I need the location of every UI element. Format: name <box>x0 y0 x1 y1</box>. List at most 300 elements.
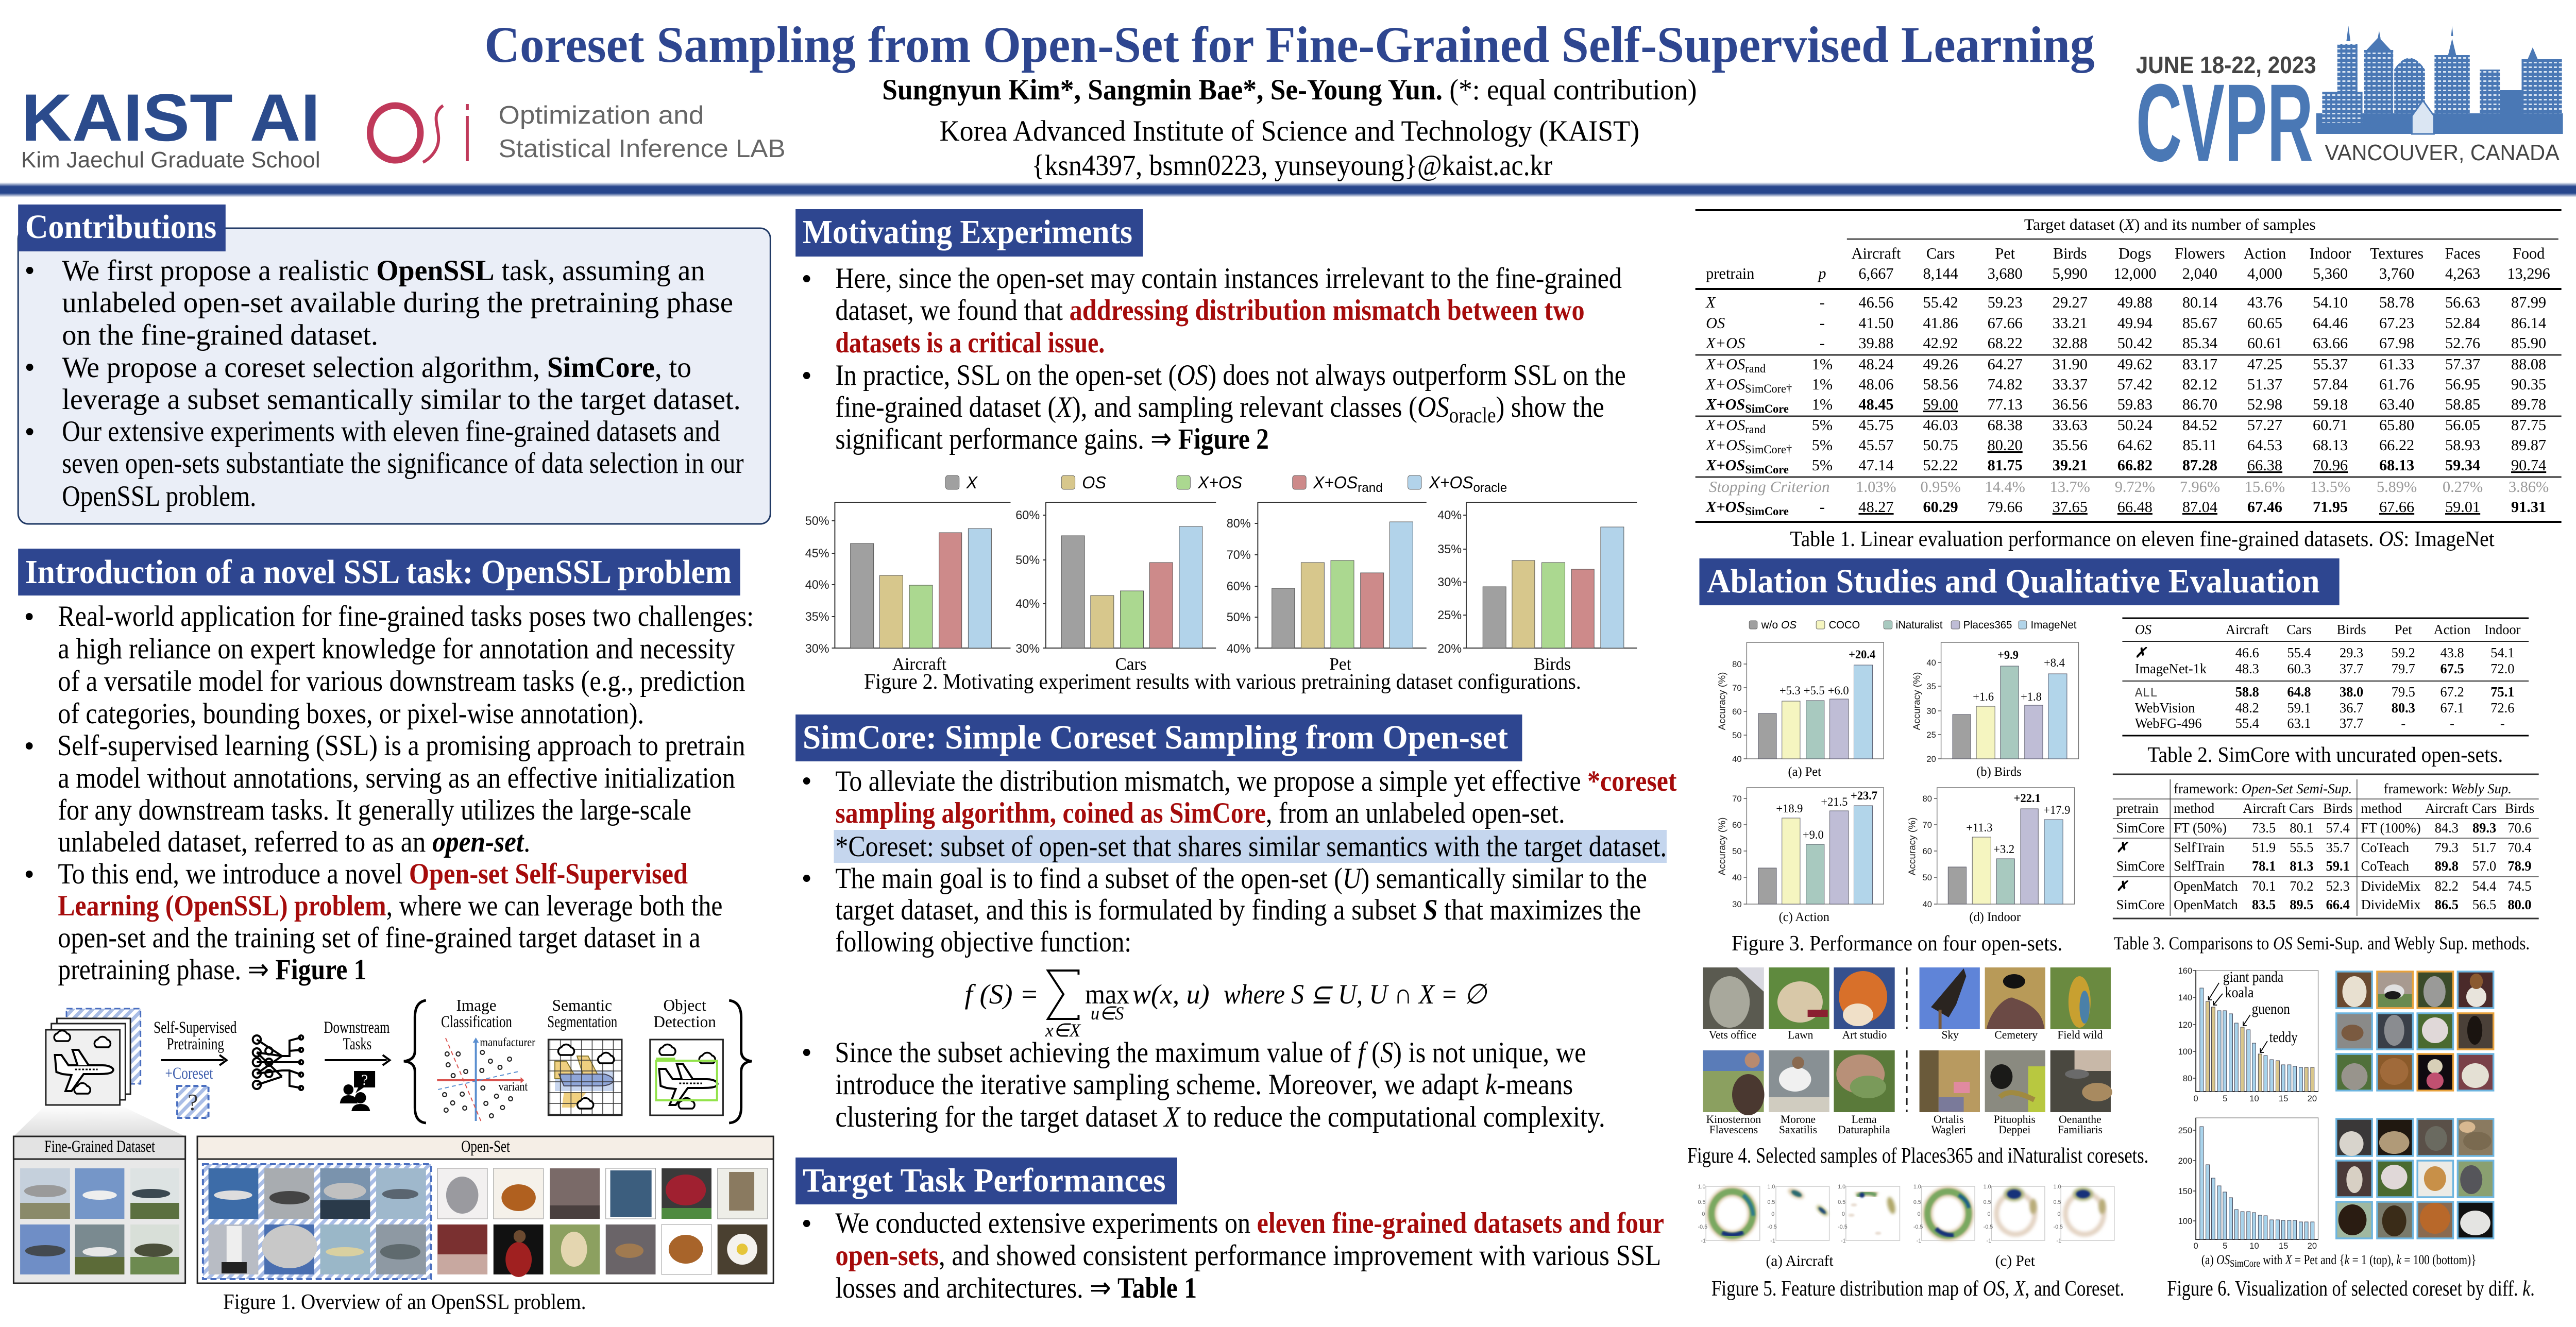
table 1: linear evaluation: SimCore <box>1745 505 1789 518</box>
map tick labels: -0.5 <box>1698 1224 1707 1230</box>
table 3: semi-sup and webly sup comparisons: SimCore <box>2116 897 2165 912</box>
table 1: linear evaluation: SimCore <box>1745 402 1789 415</box>
table 1: linear evaluation: 6,667 <box>1858 265 1894 282</box>
task: image classification: variant <box>499 1080 528 1094</box>
table 1: linear evaluation: 86.14 <box>2511 314 2546 332</box>
table 3: semi-sup and webly sup comparisons: 89.8 <box>2435 858 2459 874</box>
table 3: semi-sup and webly sup comparisons: ✗ <box>2116 840 2128 855</box>
table 1: linear evaluation: 5,360 <box>2313 265 2348 282</box>
table 1: linear evaluation: 87.04 <box>2182 498 2217 516</box>
table 1: linear evaluation: 3,680 <box>1988 265 2023 282</box>
chart: (d) Indoor: 50 <box>1923 873 1932 882</box>
table 3: semi-sup and webly sup comparisons: Birds <box>2505 801 2534 816</box>
table 1: linear evaluation: X <box>1705 294 1716 311</box>
table 1: linear evaluation: X+OS <box>1706 416 1745 434</box>
table 1: linear evaluation: 5% <box>1812 416 1833 434</box>
table 1: linear evaluation: 0.27% <box>2443 478 2483 496</box>
table 3: semi-sup and webly sup comparisons: FT (50%) <box>2174 820 2227 836</box>
map tick labels: 0.5 <box>1767 1199 1775 1205</box>
table 1: linear evaluation: 52.76 <box>2445 334 2480 352</box>
table 1: linear evaluation: 4,000 <box>2247 265 2282 282</box>
chart: (b) Birds: 20 <box>1926 754 1936 764</box>
table 3: semi-sup and webly sup comparisons: 54.4 <box>2472 878 2496 894</box>
table 3: semi-sup and webly sup comparisons: OpenMatch <box>2174 897 2238 912</box>
table 1: linear evaluation: Dogs <box>2119 245 2151 262</box>
text block: introduction bullets: pretraining phase. ⇒ Figure 1 <box>58 954 366 986</box>
table 2: uncurated open-sets: Pet <box>2395 622 2412 637</box>
text block: introduction bullets: Real-world application for fine-grained tasks poses two challenges: <box>58 600 754 633</box>
table 3: semi-sup and webly sup comparisons <box>2113 774 2539 918</box>
panel: Contributions: on the fine-grained dataset. <box>62 319 378 351</box>
chart: k=100 histogram: 200 <box>2178 1156 2192 1166</box>
task: image classification: Image <box>456 996 497 1014</box>
table 2: uncurated open-sets: 29.3 <box>2340 645 2363 660</box>
table 3: semi-sup and webly sup comparisons: 89.5 <box>2290 897 2313 912</box>
map tick labels: 0 <box>1988 1211 1990 1217</box>
table 1: linear evaluation: 57.27 <box>2247 416 2282 434</box>
figure 2: legend: oracle <box>1473 481 1507 495</box>
map tick labels: 1.0 <box>1984 1184 1991 1190</box>
table 2: uncurated open-sets <box>2122 618 2529 736</box>
table 1: linear evaluation: 5% <box>1812 456 1833 474</box>
equation: objective function: where S ⊆ U, U ∩ X = ∅ <box>1224 978 1487 1010</box>
table 1: linear evaluation: Food <box>2513 245 2545 262</box>
panel: Contributions: unlabeled open-set available during the pretraining phase <box>62 286 733 319</box>
table 1: linear evaluation: 90.35 <box>2511 376 2546 393</box>
table 1: linear evaluation: 0.95% <box>1920 478 1961 496</box>
map tick labels: -0.5 <box>1767 1224 1777 1230</box>
table 1: linear evaluation: 87.75 <box>2511 416 2546 434</box>
chart: k=100 histogram: 15 <box>2279 1241 2288 1251</box>
table 2: uncurated open-sets: 48.3 <box>2235 661 2259 676</box>
table 1: linear evaluation: 58.78 <box>2379 294 2414 311</box>
figure 4 labels: Kinosternon <box>1706 1113 1761 1126</box>
table 1: linear evaluation: 47.25 <box>2247 355 2282 373</box>
table 1: linear evaluation: 67.98 <box>2379 334 2414 352</box>
map tick labels: -1 <box>1987 1238 1991 1244</box>
text block: introduction bullets: Learning (OpenSSL) problem, where we can leverage both the <box>58 890 722 922</box>
figure 2: legend: X+OS <box>1313 473 1358 492</box>
table 1: linear evaluation: 35.56 <box>2053 436 2088 454</box>
map: pet OS ring <box>1927 1192 1969 1236</box>
table 1: linear evaluation: 50.75 <box>1923 436 1958 454</box>
task: image classification: Classification <box>441 1013 512 1031</box>
task: object detection <box>650 996 723 1115</box>
figure 4 labels: Art studio <box>1842 1029 1887 1041</box>
table 2: uncurated open-sets: 79.5 <box>2392 684 2415 700</box>
map tick labels: -0.5 <box>1838 1224 1848 1230</box>
table 1: linear evaluation: 74.82 <box>1988 376 2023 393</box>
chart: Pet: 70% <box>1227 549 1251 562</box>
chart: k=1 histogram: 80 <box>2183 1074 2192 1083</box>
table 1: linear evaluation: 9.72% <box>2115 478 2155 496</box>
table 3: semi-sup and webly sup comparisons: 57.4 <box>2326 820 2350 836</box>
equation: objective function <box>965 971 1487 1041</box>
panel: Open-Set <box>197 1136 773 1283</box>
figure 2: legend: rand <box>1358 481 1383 495</box>
table 3: semi-sup and webly sup comparisons: 82.2 <box>2435 878 2459 894</box>
table 1: linear evaluation: 71.95 <box>2313 498 2348 516</box>
table 2: uncurated open-sets: 54.1 <box>2490 645 2514 660</box>
table 3: semi-sup and webly sup comparisons: method <box>2361 801 2402 816</box>
table 3: semi-sup and webly sup comparisons: framework: Open-Set Semi-Sup. <box>2174 781 2352 796</box>
text block: motivating bullets: oracle <box>1449 403 1496 427</box>
map tick labels: 1.0 <box>1698 1184 1705 1190</box>
logo: CVPR 2023 <box>2136 26 2563 184</box>
table 1: linear evaluation: 85.90 <box>2511 334 2546 352</box>
table 2: uncurated open-sets: 67.1 <box>2440 700 2464 716</box>
affiliation: Korea Advanced Institute of Science and Technology (KAIST) <box>940 115 1639 147</box>
table 1: linear evaluation: 47.14 <box>1858 456 1894 474</box>
icon: stacked dataset cards <box>13 1009 185 1136</box>
chart: (c) Action: Accuracy (%) <box>1717 818 1727 875</box>
table 1: linear evaluation: 1% <box>1812 355 1833 373</box>
panel: Contributions: leverage a subset semantically similar to the target dataset. <box>62 383 741 416</box>
logo: CVPR 2023: JUNE 18-22, 2023 <box>2136 52 2316 78</box>
chart: k=1 histogram: giant panda <box>2223 969 2283 985</box>
chart: Birds: 35% <box>1437 543 1462 556</box>
heading: Ablation Studies: Ablation Studies and Qualitative Evaluation <box>1707 563 2320 600</box>
table 3: semi-sup and webly sup comparisons: ✗ <box>2116 878 2128 894</box>
logo: CVPR 2023: VANCOUVER, CANADA <box>2325 141 2560 165</box>
heading: Motivating Experiments: Motivating Experiments <box>803 213 1132 251</box>
image grid: k=1 samples <box>2336 972 2494 1091</box>
figure 4: selected sample photos <box>1703 967 2112 1136</box>
table 2: uncurated open-sets: ✗ <box>2135 645 2147 660</box>
text block: SimCore bullets: The main goal is to find a subset of the open-set (U) semantically similar to the <box>835 862 1647 895</box>
subcaption: figure 6: SimCore <box>2230 1258 2260 1269</box>
chart: (c) Action: 40 <box>1732 873 1742 882</box>
table 1: linear evaluation: 85.34 <box>2182 334 2217 352</box>
chart: (a) Pet: 80 <box>1732 659 1742 669</box>
caption: figure 1: Figure 1. Overview of an OpenSSL problem. <box>223 1290 586 1314</box>
text block: introduction bullets: open-set and the training set of fine-grained target dataset in a <box>58 922 700 954</box>
table 2: uncurated open-sets: 79.7 <box>2392 661 2415 676</box>
text block: SimCore bullets: Since the subset achieving the maximum value of f (S) is not unique, we <box>835 1036 1586 1069</box>
table 1: linear evaluation: 68.13 <box>2379 456 2414 474</box>
table 1: linear evaluation: 87.28 <box>2182 456 2217 474</box>
figure 4 labels: Pituophis <box>1994 1113 2036 1126</box>
table 1: linear evaluation: 65.80 <box>2379 416 2414 434</box>
table 1: linear evaluation: 8,144 <box>1923 265 1958 282</box>
table 1: linear evaluation: 48.45 <box>1858 396 1894 413</box>
logo: CVPR 2023: CVPR <box>2136 61 2313 184</box>
map tick labels: 0.5 <box>1838 1199 1845 1205</box>
chart: (a) Pet: +20.4 <box>1849 648 1875 661</box>
chart: (d) Indoor: (d) Indoor <box>1969 910 2021 924</box>
map tick labels: -1 <box>1841 1238 1846 1244</box>
table 2: uncurated open-sets: 80.3 <box>2392 700 2415 716</box>
task: semantic segmentation: Semantic <box>552 996 612 1014</box>
map: aircraft coreset clusters <box>1849 1193 1897 1235</box>
table 2: uncurated open-sets: 43.8 <box>2440 645 2464 660</box>
table 2: uncurated open-sets: 72.6 <box>2490 700 2514 716</box>
chart: Birds: 25% <box>1437 609 1462 622</box>
chart: (a) Pet: 60 <box>1732 707 1742 717</box>
table 3: semi-sup and webly sup comparisons: 73.5 <box>2252 820 2276 836</box>
text block: target task bullet: open-sets, and showed consistent performance improvement with various SSL <box>835 1239 1661 1272</box>
panel: Contributions: Our extensive experiments with eleven fine-grained datasets and <box>62 415 720 448</box>
figure 4 labels: Sky <box>1941 1029 1959 1041</box>
table 3: semi-sup and webly sup comparisons: SimCore <box>2116 820 2165 836</box>
chart: k=100 histogram: 150 <box>2178 1186 2192 1196</box>
table 2: uncurated open-sets: - <box>2500 716 2505 731</box>
chart: Pet: Pet <box>1329 655 1352 674</box>
map tick labels: -0.5 <box>2054 1224 2063 1230</box>
map tick labels: -1 <box>1917 1238 1921 1244</box>
table 3: semi-sup and webly sup comparisons: 66.4 <box>2326 897 2350 912</box>
table 1: linear evaluation: 46.56 <box>1858 294 1894 311</box>
table 1: linear evaluation: 66.48 <box>2117 498 2153 516</box>
table 2: uncurated open-sets: - <box>2401 716 2405 731</box>
text block: SimCore bullets: To alleviate the distribution mismatch, we propose a simple yet effective *coreset <box>835 765 1677 797</box>
table 1: linear evaluation: Indoor <box>2310 245 2351 262</box>
table 1: linear evaluation: 12,000 <box>2113 265 2157 282</box>
text block: SimCore bullets: target dataset, and this is formulated by finding a subset S that maximizes the <box>835 894 1641 926</box>
table 1: linear evaluation: 33.21 <box>2053 314 2088 332</box>
figure 4 labels: Lawn <box>1788 1029 1814 1041</box>
table 1: linear evaluation: 45.75 <box>1858 416 1894 434</box>
map: pet X cluster <box>1996 1187 2037 1234</box>
chart: (a) Pet: +6.0 <box>1828 684 1849 697</box>
table 2: uncurated open-sets: Aircraft <box>2226 622 2269 637</box>
table 1: linear evaluation: 54.10 <box>2313 294 2348 311</box>
table 1: linear evaluation: 36.56 <box>2053 396 2088 413</box>
subcaption: figure 6: X = Pet and {k = 1 (top), k = 100 (bottom)} <box>2285 1252 2490 1267</box>
table 1: linear evaluation: 81.75 <box>1988 456 2023 474</box>
table 2: uncurated open-sets: ALL <box>2135 686 2158 701</box>
panel: Contributions: We propose a coreset selection algorithm, SimCore, to <box>62 351 691 384</box>
table 1: linear evaluation: 39.88 <box>1858 334 1894 352</box>
table 3: semi-sup and webly sup comparisons: 79.3 <box>2435 840 2459 855</box>
table 1: linear evaluation: 52.22 <box>1923 456 1958 474</box>
map tick labels: 0.5 <box>1913 1199 1921 1205</box>
highlight: coreset definition <box>834 830 1667 863</box>
table 2: uncurated open-sets: 37.7 <box>2340 661 2363 676</box>
text block: SimCore bullets: following objective function: <box>835 926 1131 958</box>
table 1: linear evaluation: 15.6% <box>2245 478 2285 496</box>
chart: (c) Action: +9.0 <box>1803 828 1824 841</box>
table 1: linear evaluation: 33.63 <box>2053 416 2088 434</box>
chart: Pet: 40% <box>1227 642 1251 656</box>
table 1: linear evaluation: 55.42 <box>1923 294 1958 311</box>
chart: k=100 histogram: 0 <box>2194 1241 2198 1251</box>
caption: figure 3: Figure 3. Performance on four open-sets. <box>1732 931 2062 955</box>
chart: (a) Pet <box>1717 642 1884 779</box>
heading: SimCore: SimCore: Simple Coreset Sampling from Open-set <box>803 719 1508 756</box>
header band <box>0 182 2576 197</box>
text block: SimCore bullets: introduce the iterative sampling scheme. Moreover, we adapt k-means <box>835 1068 1573 1101</box>
table 1: linear evaluation: 63.66 <box>2313 334 2348 352</box>
table 1: linear evaluation <box>1696 210 2562 522</box>
chart: (b) Birds: (b) Birds <box>1976 765 2022 779</box>
figure 4 labels: Cemetery <box>1994 1029 2038 1041</box>
chart: k=1 histogram: 20 <box>2308 1094 2317 1103</box>
panel: Fine-Grained Dataset <box>13 1136 185 1283</box>
chart: (c) Action: 30 <box>1732 899 1742 909</box>
panel: Contributions: seven open-sets substantiate the significance of data selection in our <box>62 447 744 480</box>
table 1: linear evaluation: 67.66 <box>1988 314 2023 332</box>
chart: k=1 histogram: koala <box>2225 984 2254 1001</box>
table 3: semi-sup and webly sup comparisons: CoTeach <box>2361 858 2409 874</box>
table 1: linear evaluation: - <box>1820 294 1825 311</box>
map tick labels: -0.5 <box>1913 1224 1923 1230</box>
table 3: semi-sup and webly sup comparisons: 81.3 <box>2290 858 2313 874</box>
map tick labels <box>1698 1184 2063 1244</box>
table 3: semi-sup and webly sup comparisons: SelfTrain <box>2174 840 2225 855</box>
table 2: uncurated open-sets: 38.0 <box>2340 684 2363 700</box>
table 1: linear evaluation: 66.38 <box>2247 456 2282 474</box>
chart: Pet: 80% <box>1227 517 1251 531</box>
table 1: linear evaluation: 31.90 <box>2053 355 2088 373</box>
table 1: linear evaluation: 63.40 <box>2379 396 2414 413</box>
table 1: linear evaluation: 4,263 <box>2445 265 2480 282</box>
chart: k=100 histogram: 20 <box>2308 1241 2317 1251</box>
chart: k=1 histogram: 15 <box>2279 1094 2288 1103</box>
chart: Cars: 60% <box>1015 509 1040 522</box>
chart: (b) Birds: 35 <box>1926 682 1936 691</box>
chart: (c) Action: 70 <box>1732 794 1742 804</box>
table 1: linear evaluation: 87.99 <box>2511 294 2546 311</box>
table 2: uncurated open-sets: Birds <box>2337 622 2366 637</box>
table 1: linear evaluation: 39.21 <box>2053 456 2088 474</box>
table 3: semi-sup and webly sup comparisons: 84.3 <box>2435 820 2459 836</box>
table 1: linear evaluation: 1% <box>1812 396 1833 413</box>
chart: Birds: 30% <box>1437 576 1462 589</box>
authors: Sungnyun Kim*, Sangmin Bae*, Se-Young Yun. (*: equal contribution) <box>882 74 1697 106</box>
logo: OSI lab: Statistical Inference LAB <box>499 135 786 163</box>
task: semantic segmentation: Segmentation <box>547 1013 617 1031</box>
chart: k=1 histogram: guenon <box>2252 1001 2290 1017</box>
text block: motivating bullets: Here, since the open-set may contain instances irrelevant to the fine-grained <box>835 262 1622 295</box>
chart: (a) Pet: Accuracy (%) <box>1717 672 1727 730</box>
task: semantic segmentation <box>547 996 622 1115</box>
table 1: linear evaluation: 13.5% <box>2310 478 2350 496</box>
panel: Target Task Performances <box>795 1158 1664 1304</box>
table 3: semi-sup and webly sup comparisons: 51.7 <box>2472 840 2496 855</box>
emails: {ksn4397, bsmn0223, yunseyoung}@kaist.ac.kr <box>1032 149 1552 182</box>
panel: Introduction of a novel SSL task <box>18 549 754 986</box>
label: Downstream Tasks arrow: Tasks <box>343 1035 371 1053</box>
table 1: linear evaluation: 61.33 <box>2379 355 2414 373</box>
table 3: semi-sup and webly sup comparisons: SelfTrain <box>2174 858 2225 874</box>
chart: (d) Indoor: Accuracy (%) <box>1907 818 1918 875</box>
table 2: uncurated open-sets: 55.4 <box>2287 645 2311 660</box>
text block: SimCore bullets <box>803 765 1677 1133</box>
table 2: uncurated open-sets: ImageNet-1k <box>2135 661 2207 676</box>
text block: motivating bullets: datasets is a critical issue. <box>835 327 1105 359</box>
table 3: semi-sup and webly sup comparisons: 57.0 <box>2472 858 2496 874</box>
table 1: linear evaluation: 82.12 <box>2182 376 2217 393</box>
task: object detection: Detection <box>653 1013 716 1031</box>
table 1: linear evaluation: 61.76 <box>2379 376 2414 393</box>
table 1: linear evaluation: 2,040 <box>2182 265 2217 282</box>
caption: table 2: Table 2. SimCore with uncurated open-sets. <box>2147 743 2503 767</box>
table 1: linear evaluation: 84.52 <box>2182 416 2217 434</box>
figure 3: legend: COCO <box>1829 619 1860 631</box>
table 1: linear evaluation: X+OS <box>1706 456 1745 474</box>
figure 4 labels: Ortalis <box>1934 1113 1964 1126</box>
figure 4 labels: Morone <box>1781 1113 1816 1126</box>
figure 4 labels: Daturaphila <box>1838 1124 1890 1136</box>
table 1: linear evaluation: 64.53 <box>2247 436 2282 454</box>
chart: (b) Birds: 25 <box>1926 730 1936 740</box>
table 3: semi-sup and webly sup comparisons: Cars <box>2289 801 2314 816</box>
figure 3: legend <box>1749 619 2077 631</box>
text block: motivating bullets: fine-grained dataset (X), and sampling relevant classes (OS <box>835 391 1453 423</box>
table 3: semi-sup and webly sup comparisons: 70.1 <box>2252 878 2276 894</box>
table 1: linear evaluation: 33.37 <box>2053 376 2088 393</box>
map tick labels: 1.0 <box>2054 1184 2061 1190</box>
table 1: linear evaluation: 52.84 <box>2445 314 2480 332</box>
caption: figure 2: Figure 2. Motivating experiment results with various pretraining dataset configurations. <box>864 670 1581 693</box>
table 3: semi-sup and webly sup comparisons: Cars <box>2472 801 2497 816</box>
map tick labels: -1 <box>1770 1238 1775 1244</box>
table 1: linear evaluation: 57.42 <box>2117 376 2153 393</box>
label: Self-Supervised Pretraining arrow: +Coreset <box>165 1064 213 1083</box>
table 1: linear evaluation: Flowers <box>2175 245 2225 262</box>
table 1: linear evaluation: 64.46 <box>2313 314 2348 332</box>
table 1: linear evaluation: 90.74 <box>2511 456 2546 474</box>
chart: (a) Pet: 70 <box>1732 683 1742 693</box>
table 1: linear evaluation: 59.83 <box>2117 396 2153 413</box>
table 1: linear evaluation: 50.24 <box>2117 416 2153 434</box>
chart: (d) Indoor: +3.2 <box>1993 843 2014 856</box>
chart: Aircraft: 50% <box>805 515 829 528</box>
table 1: linear evaluation: 60.71 <box>2313 416 2348 434</box>
table 1: linear evaluation: SimCore† <box>1745 443 1792 456</box>
table 1: linear evaluation: 13.7% <box>2050 478 2090 496</box>
table 1: linear evaluation: 56.05 <box>2445 416 2480 434</box>
text block: introduction bullets: To this end, we introduce a novel Open-set Self-Supervised <box>58 858 688 890</box>
table 1: linear evaluation: 77.13 <box>1988 396 2023 413</box>
table 3: semi-sup and webly sup comparisons: FT (100%) <box>2361 820 2421 836</box>
table 1: linear evaluation: X+OS <box>1706 498 1745 516</box>
table 1: linear evaluation: 56.95 <box>2445 376 2480 393</box>
figure 3: legend: ImageNet <box>2031 619 2077 631</box>
table 2: uncurated open-sets: OS <box>2135 622 2151 637</box>
table 2: uncurated open-sets: 67.5 <box>2440 661 2464 676</box>
text block: motivating bullets: ) show the <box>1496 391 1604 423</box>
table 1: linear evaluation: 48.06 <box>1858 376 1894 393</box>
logo: OSI lab: Optimization and <box>499 101 704 129</box>
table 1: linear evaluation: 14.4% <box>1985 478 2025 496</box>
text block: SimCore bullets: sampling algorithm, coined as SimCore, from an unlabeled open-set. <box>835 797 1565 829</box>
table 2: uncurated open-sets: - <box>2450 716 2454 731</box>
chart: (c) Action <box>1717 788 1884 924</box>
chart: (c) Action: 60 <box>1732 820 1742 830</box>
text block: SimCore bullets: *Coreset: subset of open-set that shares similar semantics with the target dataset. <box>835 830 1667 863</box>
figure 2: legend: X+OS <box>1429 473 1474 492</box>
figure 3: legend: Places365 <box>1963 619 2012 631</box>
table 1: linear evaluation: p <box>1817 265 1826 282</box>
table 1: linear evaluation: 80.14 <box>2182 294 2217 311</box>
chart: (b) Birds: +1.6 <box>1973 690 1994 703</box>
icon: people asking question <box>340 1071 375 1111</box>
table 1: linear evaluation: 49.88 <box>2117 294 2153 311</box>
table 3: semi-sup and webly sup comparisons: Birds <box>2323 801 2352 816</box>
table 2: uncurated open-sets: 36.7 <box>2340 700 2363 716</box>
chart: k=1 histogram: 160 <box>2178 966 2192 976</box>
table 1: linear evaluation: 67.23 <box>2379 314 2414 332</box>
table 1: linear evaluation: 60.61 <box>2247 334 2282 352</box>
table 1: linear evaluation: Pet <box>1995 245 2015 262</box>
map tick labels: 1.0 <box>1913 1184 1921 1190</box>
panel: Contributions: Contributions <box>25 208 216 246</box>
table 2: uncurated open-sets: Indoor <box>2484 622 2521 637</box>
map: pet coreset cluster <box>2065 1187 2106 1234</box>
chart: (c) Action: +21.5 <box>1821 795 1848 808</box>
